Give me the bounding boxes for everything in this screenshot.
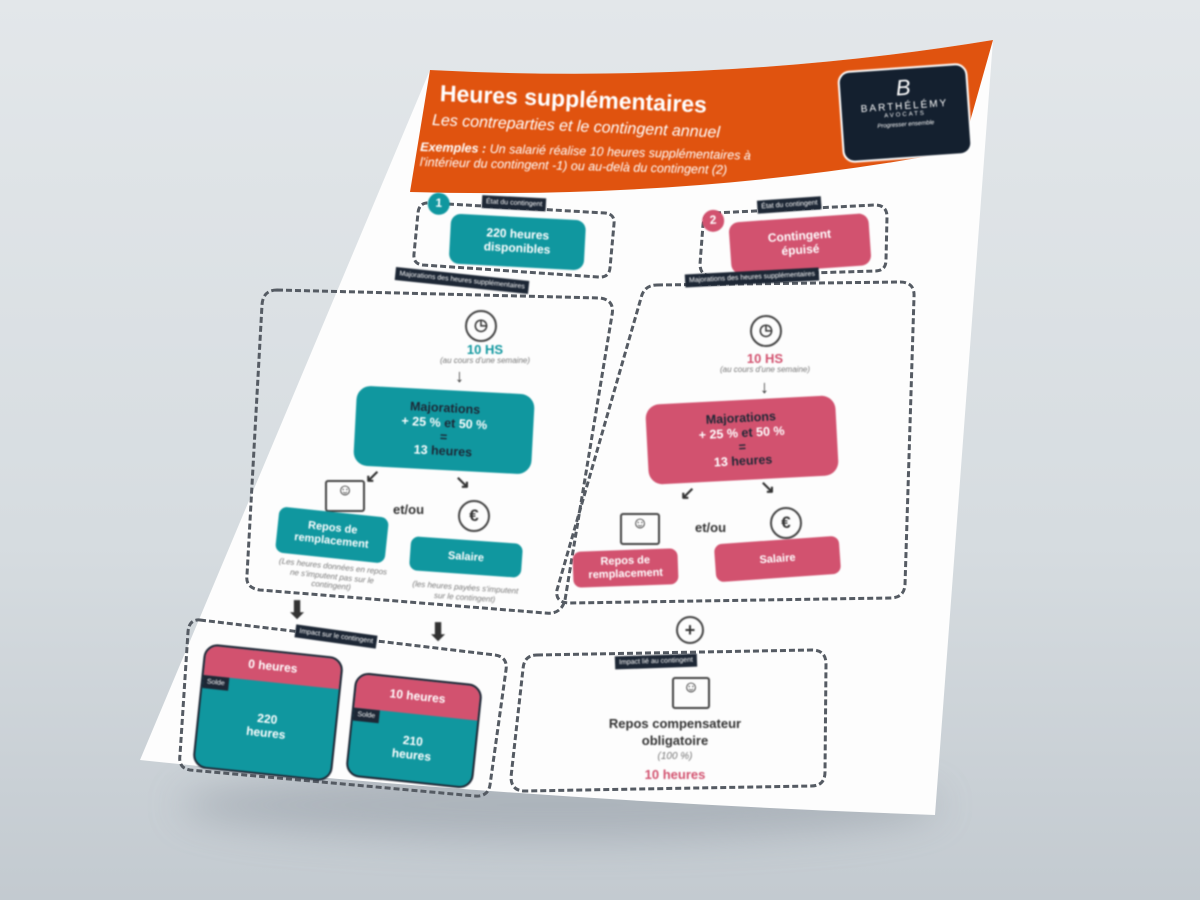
- panel: state 2: Contingent: [767, 227, 832, 245]
- majorations box: [353, 385, 535, 475]
- panel: majorations right: €: [781, 513, 791, 532]
- card 0 heures: 0 heures: [248, 657, 298, 676]
- panel: majorations right: ◷: [759, 322, 773, 339]
- panel: state 2: État du contingent: [761, 200, 818, 210]
- panel: majorations right: remplacement: [588, 567, 663, 581]
- card 10 heures: [345, 672, 483, 789]
- teal box: [449, 213, 586, 270]
- card 0 heures: heures: [246, 724, 286, 742]
- card 10 heures: 10 heures: [389, 686, 446, 706]
- panel: state 2: 2: [709, 213, 717, 227]
- panel: majorations left: 10 HS: [467, 342, 503, 357]
- panel: majorations left: (au cours d'une semaine): [440, 356, 530, 365]
- panel: majorations left: [274, 266, 536, 604]
- icon: euro: [458, 500, 490, 532]
- card 10 heures: Solde: [357, 711, 376, 720]
- majorations box: Majorations: [410, 399, 481, 417]
- panel: impact left: Impact sur le contingent: [299, 628, 373, 645]
- panel: majorations right: 13 heures: [714, 453, 773, 470]
- logo: AVOCATS: [884, 111, 926, 119]
- panel: impact right: Repos compensateur: [609, 716, 741, 731]
- text: Majorations des heures supplémentaires: [689, 271, 815, 284]
- paper shadow: [180, 770, 940, 840]
- text: Majorations des heures supplémentaires: [399, 270, 525, 291]
- card 10 heures: heures: [391, 746, 432, 764]
- panel: impact right: obligatoire: [642, 733, 708, 748]
- panel: majorations left: (les heures payées s'imputent sur le contingent): [412, 579, 519, 604]
- panel: majorations left: remplacement: [294, 531, 369, 551]
- clock icon: ◷: [474, 317, 488, 334]
- majorations box: 13 heures: [413, 443, 472, 460]
- logo: [837, 63, 973, 163]
- panel: impact right: Impact lié au contingent: [619, 657, 693, 666]
- panel: majorations left: ↓: [455, 366, 464, 386]
- subtitle: Les contreparties et le contingent annuel: [432, 112, 720, 142]
- teal box: disponibles: [483, 239, 551, 257]
- panel: impact right: 10 heures: [645, 767, 705, 782]
- panel: majorations left: Salaire: [448, 549, 484, 564]
- examples text: Exemples : Un salarié réalise 10 heures supplémentaires à l'intérieur du contingent -1) ou au-delà du contingent (2): [420, 140, 751, 177]
- panel: impact right: (100 %): [657, 751, 692, 762]
- logo: B: [895, 75, 911, 101]
- arrows down: ⬇: [287, 597, 307, 624]
- panel: majorations right: ↓: [760, 377, 769, 397]
- panel: state 2: [701, 195, 872, 273]
- card 10 heures: 210: [402, 733, 424, 749]
- panel: state 1: [426, 192, 587, 271]
- card 0 heures: [192, 643, 344, 782]
- panel: majorations right: 10 HS: [747, 351, 783, 366]
- icon: plus: [676, 616, 704, 644]
- panel: majorations right: Salaire: [759, 551, 796, 566]
- clock icon: [465, 310, 497, 342]
- majorations box: + 25 % et 50 %: [401, 413, 488, 432]
- panel: majorations right: et/ou: [695, 520, 726, 535]
- icon: photo: [325, 480, 365, 512]
- majorations box: =: [440, 430, 448, 444]
- tag: État du contingent: [486, 198, 543, 208]
- logo: BARTHÉLÉMY: [860, 98, 949, 115]
- tag: [482, 195, 547, 211]
- panel: impact left: [192, 624, 483, 789]
- panel: majorations left: Repos de: [307, 520, 358, 537]
- text: ⬇: [428, 619, 448, 646]
- panel: majorations left: (Les heures données en repos ne s'imputent pas sur le contingent): [279, 556, 387, 592]
- teal box: 220 heures: [486, 226, 549, 243]
- icon: euro: €: [469, 506, 479, 525]
- panel: majorations left: ↙: [365, 466, 380, 486]
- panel: majorations right: Majorations: [705, 409, 776, 427]
- panel: majorations left: et/ou: [393, 502, 424, 517]
- panel: majorations right: (au cours d'une semaine): [720, 365, 810, 374]
- icon: photo: ☺: [337, 482, 353, 499]
- badge 1: [427, 192, 450, 215]
- card 0 heures: Solde: [206, 678, 225, 687]
- panel: state 2: épuisé: [781, 242, 820, 258]
- panel: impact right: ☺: [683, 679, 699, 696]
- panel: majorations left: ↘: [455, 472, 470, 492]
- icon: plus: +: [685, 620, 695, 640]
- panel: majorations right: + 25 % et 50 %: [698, 423, 785, 442]
- panel: impact right: [608, 652, 742, 782]
- panel: majorations right: ☺: [632, 515, 648, 532]
- panel: majorations right: [572, 266, 842, 588]
- badge 1: 1: [435, 196, 443, 210]
- panel: majorations right: Repos de: [600, 555, 650, 568]
- card 0 heures: 220: [257, 711, 278, 727]
- panel: majorations right: =: [738, 440, 746, 454]
- title: Heures supplémentaires: [439, 80, 708, 118]
- panel: majorations right: ↙: [680, 483, 695, 503]
- panel: majorations right: ↘: [760, 477, 775, 497]
- logo: Progresser ensemble: [877, 120, 934, 130]
